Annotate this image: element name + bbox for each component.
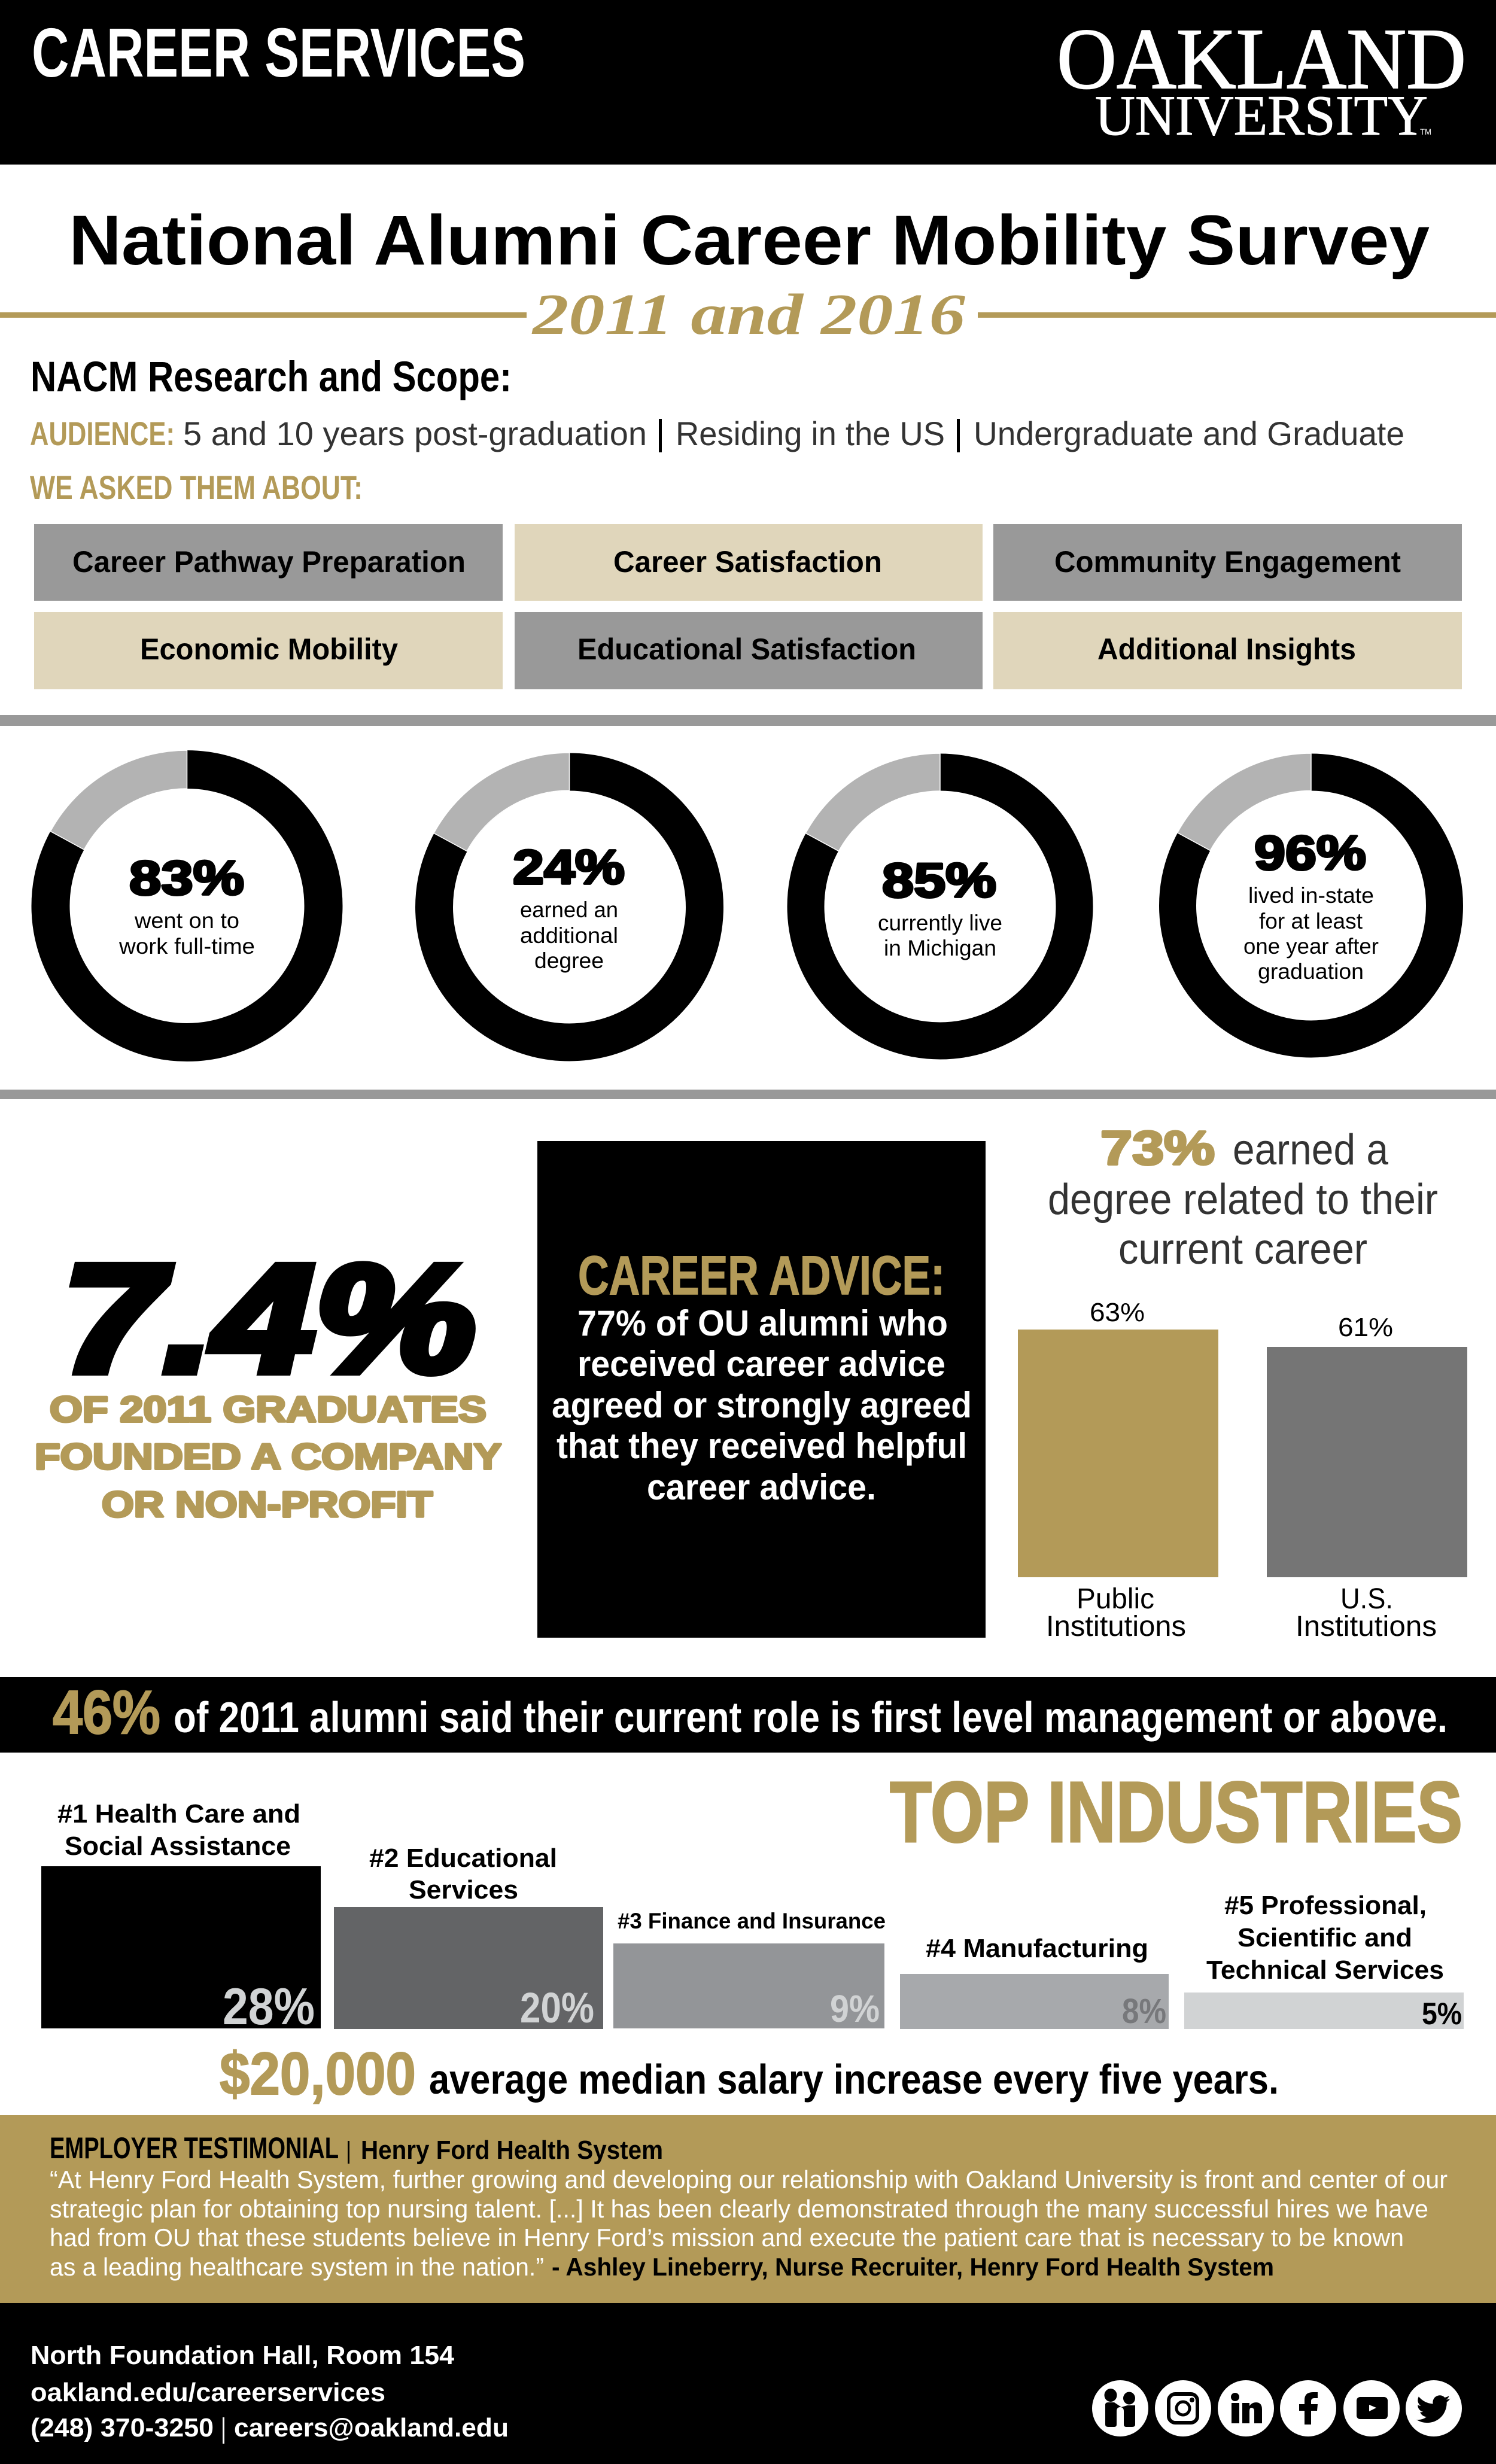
donut: 85% live in Michigan: 85% [882, 854, 996, 908]
donut: 96% lived in-state: 96% [1254, 826, 1366, 880]
stat: 73% earned a related degree: 73% [1100, 1121, 1215, 1175]
stat: $20,000 salary increase [220, 2040, 1279, 2107]
stat: 73% earned a related degree: degree related to their [1048, 1176, 1438, 1224]
audience line [30, 415, 1404, 452]
industry 1: health care: 28% [223, 1978, 315, 2036]
panel: career advice: 77% of OU alumni who [577, 1303, 948, 1343]
industry 2: educational services: 20% [520, 1985, 594, 2032]
industry 5: professional services: #5 Professional, [1224, 1891, 1427, 1920]
stat: 7.4% founded a company: OF 2011 GRADUATES [50, 1389, 486, 1429]
panel: career advice [537, 1141, 986, 1638]
donut: 85% live in Michigan: currently live [878, 911, 1002, 935]
industry 2: educational services [334, 1844, 603, 2032]
donut: 83% full-time: 83% [129, 851, 244, 905]
contact details [31, 2341, 509, 2444]
tile: economic mobility: Economic Mobility [140, 632, 398, 666]
bar: U.S. institutions 61%: Institutions [1296, 1611, 1437, 1642]
panel: career advice: CAREER ADVICE: [578, 1245, 945, 1306]
tile: career pathway preparation [34, 524, 503, 601]
stat: $20,000 salary increase: $20,000 [220, 2040, 416, 2107]
stat: 73% earned a related degree: earned a [1233, 1126, 1389, 1174]
testimonial quote: - Ashley Lineberry, Nurse Recruiter, Henry Ford Health System [552, 2253, 1274, 2281]
panel: career advice: agreed or strongly agreed [552, 1385, 972, 1425]
chart: top industries [41, 1799, 1464, 2036]
label: we asked them about: WE ASKED THEM ABOUT: [30, 469, 363, 506]
panel: career advice: that they received helpful [557, 1426, 967, 1466]
testimonial quote [50, 2165, 1448, 2281]
Oakland University logo wordmark: OAKLAND [1057, 11, 1466, 107]
header band [0, 0, 1496, 165]
testimonial quote: as a leading healthcare system in the nation.” [50, 2253, 544, 2281]
donut: 96% lived in-state: graduation [1258, 959, 1364, 984]
audience line: Undergraduate and Graduate [974, 415, 1404, 452]
contact details: oakland.edu/careerservices [31, 2378, 385, 2407]
donut: 24% additional degree: earned an [520, 898, 618, 922]
bar chart: degree related to career [1018, 1298, 1467, 1642]
tile: career pathway preparation: Career Pathway Preparation [72, 545, 466, 579]
industry 3: finance and insurance: #3 Finance and Insurance [618, 1909, 886, 1933]
audience line: Residing in the US [676, 415, 945, 452]
contact details: North Foundation Hall, Room 154 [31, 2341, 455, 2370]
testimonial heading [50, 2131, 663, 2165]
audience line: 5 and 10 years post-graduation [183, 415, 647, 452]
banner: 46% management: 46% [53, 1678, 160, 1747]
tile: career satisfaction: Career Satisfaction [613, 545, 882, 579]
bar: public institutions 63% [1018, 1298, 1218, 1642]
industry 1: health care [41, 1799, 321, 2036]
Oakland University logo wordmark: TM [1420, 127, 1431, 136]
donut: 96% lived in-state [1178, 753, 1445, 1039]
Oakland University logo wordmark [1057, 11, 1466, 147]
header title: Career Services: CAREER SERVICES [32, 14, 525, 92]
industry 2: educational services: #2 Educational [369, 1844, 557, 1873]
subtitle with rules: 2011 and 2016: 2011 and 2016 [531, 282, 965, 347]
stat: 7.4% founded a company: 7.4% [62, 1233, 476, 1404]
industry 3: finance and insurance: 9% [830, 1987, 880, 2030]
donut: 24% additional degree: 24% [513, 841, 625, 895]
donut: 24% additional degree [434, 753, 705, 1042]
donut: 96% lived in-state: one year after [1243, 934, 1379, 959]
donut: 83% full-time: work full-time [118, 934, 255, 959]
bar: public institutions 63%: Public [1077, 1583, 1154, 1615]
donut: 24% additional degree: degree [534, 948, 604, 973]
donut: 24% additional degree: additional [520, 923, 618, 948]
tile: additional insights: Additional Insights [1097, 632, 1356, 666]
testimonial quote: had from OU that these students believe in Henry Ford’s mission and execute the patient care that is necessary to be known [50, 2223, 1404, 2252]
industry 4: manufacturing [900, 1934, 1169, 2031]
tile: educational satisfaction: Educational Satisfaction [577, 632, 916, 666]
donut: 83% full-time: went on to [134, 908, 239, 933]
industry 1: health care: Social Assistance [65, 1832, 291, 1861]
contact details: careers@oakland.edu [234, 2413, 509, 2442]
bar: public institutions 63%: Institutions [1046, 1611, 1186, 1642]
industry 5: professional services: Scientific and [1237, 1923, 1412, 1952]
testimonial heading: EMPLOYER TESTIMONIAL [50, 2131, 339, 2165]
stat: 73% earned a related degree: current career [1118, 1225, 1367, 1273]
heading: NACM research and scope: NACM Research and Scope: [31, 354, 512, 401]
industry 2: educational services: Services [409, 1875, 518, 1905]
icon: LinkedIn [1218, 2380, 1274, 2436]
tile: educational satisfaction [515, 612, 983, 689]
panel: career advice: received career advice [577, 1344, 945, 1384]
bar: U.S. institutions 61% [1267, 1313, 1467, 1642]
testimonial heading: Henry Ford Health System [361, 2136, 663, 2165]
topic tiles [34, 524, 1462, 689]
industry 1: health care: #1 Health Care and [57, 1799, 300, 1829]
section: research and scope [30, 354, 1404, 506]
subtitle with rules: 2011 and 2016 [0, 282, 1496, 347]
donut: 83% full-time [50, 750, 324, 1042]
panel: career advice: career advice. [647, 1467, 876, 1507]
stat: 73% earned a related degree [1048, 1121, 1438, 1273]
testimonial quote: strategic plan for obtaining top nursing talent. [...] It has been clearly demonstrated through the many successful hires we have [50, 2195, 1428, 2223]
stat: 7.4% founded a company: OR NON-PROFIT [102, 1485, 433, 1525]
panel: employer testimonial [0, 2115, 1496, 2303]
banner: 46% management [0, 1677, 1496, 1753]
bar: U.S. institutions 61%: U.S. [1340, 1583, 1393, 1615]
main title: National Alumni Career Mobility Survey [69, 201, 1430, 280]
stat: 7.4% founded a company [35, 1233, 501, 1525]
stat: $20,000 salary increase: average median salary increase every five years. [429, 2056, 1279, 2103]
Oakland University logo wordmark: UNIVERSITY [1095, 84, 1428, 147]
icon: Twitter [1406, 2380, 1462, 2436]
tile: community engagement [993, 524, 1462, 601]
social icons [1092, 2380, 1462, 2436]
industry 5: professional services: Technical Services [1206, 1955, 1444, 1985]
testimonial quote: “At Henry Ford Health System, further growing and developing our relationship with Oakland University is front and center of our [50, 2165, 1448, 2194]
donut: 85% live in Michigan: in Michigan [884, 936, 996, 960]
audience line: AUDIENCE: [30, 415, 175, 452]
tile: community engagement: Community Engagement [1054, 545, 1401, 579]
icon: Handshake [1092, 2380, 1148, 2436]
industry 4: manufacturing: #4 Manufacturing [926, 1934, 1148, 1963]
footer [0, 2303, 1496, 2464]
stat: 7.4% founded a company: FOUNDED A COMPANY [35, 1437, 501, 1477]
bar: U.S. institutions 61%: 61% [1338, 1313, 1393, 1342]
tile: career satisfaction [515, 524, 983, 601]
contact details: (248) 370-3250 [31, 2413, 214, 2442]
donut: 85% live in Michigan [805, 753, 1075, 1041]
icon: Facebook [1280, 2380, 1336, 2436]
donut: 96% lived in-state: lived in-state [1248, 883, 1374, 908]
tile: additional insights [993, 612, 1462, 689]
bar: public institutions 63%: 63% [1090, 1298, 1145, 1327]
industry 4: manufacturing: 8% [1122, 1992, 1166, 2031]
tile: economic mobility [34, 612, 503, 689]
donut: 96% lived in-state: for at least [1259, 909, 1363, 933]
industry 3: finance and insurance [613, 1909, 886, 2030]
industry 5: professional services [1184, 1891, 1464, 2031]
icon: Instagram [1155, 2380, 1211, 2436]
icon: YouTube [1343, 2380, 1400, 2436]
industry 5: professional services: 5% [1422, 1997, 1462, 2031]
